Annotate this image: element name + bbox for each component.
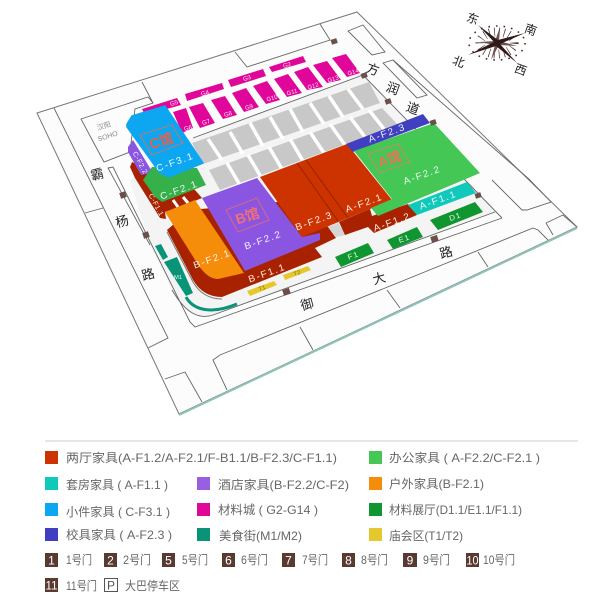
G unit labels: G2: [283, 62, 293, 70]
legend: living and dining furniture: 两厅家具(A-F1.2/A-F2.1/F-B1.1/B-F2.3/C-F1.1): [66, 450, 337, 465]
legend: school furniture: 校具家具 ( A-F2.3 ): [66, 527, 172, 542]
legend: materials city: 材料城 ( G2-G14 ): [218, 503, 318, 517]
G unit labels: G12: [307, 82, 320, 92]
hall A-F1.1 teal: [408, 182, 476, 215]
gate 5: [162, 552, 208, 568]
hall A-F2.2 green: A馆: [375, 148, 403, 170]
label C-F1.1: C-F1.1: [147, 193, 164, 218]
material hall D1: [430, 202, 483, 230]
neighbouring building label: SOHO: [97, 130, 119, 143]
gate 9: [403, 552, 450, 568]
gate 10: [466, 552, 515, 568]
temple fair T2: T2: [293, 270, 302, 278]
hall C-F1.1 dark red: [130, 162, 202, 219]
road name: fangrun road: 道: [404, 99, 422, 118]
G row materials city top strips: [142, 56, 306, 115]
G unit labels: [170, 62, 360, 133]
gate 11: 11号门: [66, 578, 97, 593]
G unit labels: G8: [224, 111, 234, 119]
gate 10: 10号门: [483, 552, 515, 567]
gate 2: 2号门: [123, 552, 151, 567]
building B-F1.1 dark base: [167, 200, 336, 299]
road name: fangrun road: [364, 60, 422, 118]
legend: materials showroom: 材料展厅(D1.1/E1.1/F1.1): [389, 503, 522, 517]
hall A-F2.2 green: A-F2.2: [402, 164, 442, 187]
gate 9: 9: [407, 554, 414, 568]
legend: food street: 美食街(M1/M2): [219, 528, 302, 543]
G unit labels: G7: [202, 119, 212, 127]
gate 6: [222, 552, 268, 568]
gate 1: 1: [48, 554, 55, 568]
legend: small furniture: 小件家具 ( C-F3.1 ): [66, 504, 170, 519]
G unit labels: G13: [327, 75, 340, 85]
bus parking: [104, 578, 180, 593]
temple fair T1: [247, 281, 277, 296]
road name: yuda road: 御: [299, 296, 315, 313]
compass labels: 西: [513, 61, 529, 79]
legend: suite furniture: 套房家具 ( A-F1.1 ): [66, 477, 168, 492]
gate 1: [45, 552, 92, 568]
compass rose: [451, 10, 539, 79]
hall B-F2.2 purple: B馆: [233, 205, 261, 227]
gate 11: [45, 578, 97, 593]
road name: yuda road: 大: [371, 270, 387, 287]
hall A-F2.2 green: [354, 123, 480, 216]
gate 6: 6: [225, 554, 232, 568]
G unit labels: G6: [184, 125, 194, 133]
base sheet: [37, 12, 577, 415]
road name: yuda road: 路: [438, 244, 454, 261]
hall C-F3.1 blue: [127, 106, 203, 177]
compass labels: 南: [523, 20, 539, 39]
G unit labels: G5: [170, 100, 180, 108]
hall B-F2.2 purple: [202, 178, 320, 271]
road name: bayang road: 杨: [114, 213, 130, 230]
legend divider: [45, 440, 578, 442]
compass labels: [451, 10, 539, 79]
gate 5: 5号门: [182, 552, 208, 567]
temple fair T1: T1: [258, 285, 267, 293]
neighbouring building label: [96, 119, 119, 143]
gate 7: [282, 552, 328, 568]
hall A-F1.2 dark red: [328, 204, 417, 237]
material hall E1: [387, 227, 423, 249]
G unit labels: G11: [286, 88, 299, 97]
hall A-F1.2 dark red: A-F1.2: [372, 211, 412, 234]
temple fair T2: [283, 266, 311, 280]
G unit labels: G9: [245, 104, 255, 112]
hall C-F2.1 green: C-F2.1: [159, 179, 200, 202]
road name: bayang road: 路: [140, 266, 156, 283]
gate 7: 7: [285, 554, 292, 568]
halls A-F2.1 and B-F2.3 red: [260, 144, 392, 237]
food street M1: [155, 244, 193, 296]
road name: fangrun road: 方: [364, 60, 382, 79]
hall C-F3.1 blue: C馆: [147, 130, 175, 152]
hall A-F2.3 indigo: [346, 114, 430, 152]
gate 9: 9号门: [423, 552, 450, 567]
hall C-F3.1 blue: C-F3.1: [155, 151, 196, 174]
hall C-F2.2 purple: C-F2.2: [131, 151, 148, 176]
gray vacant units: [192, 82, 398, 190]
G unit labels: G14: [347, 68, 360, 78]
gate 8: [342, 552, 388, 568]
gate 6: 6号门: [241, 552, 268, 567]
road name: fangrun road: 润: [384, 79, 402, 98]
hall B-F2.1 orange: [165, 200, 244, 279]
material hall E1: E1: [397, 233, 411, 245]
legend: temple fair area: 庙会区(T1/T2): [389, 529, 463, 543]
neighbouring building label: 汉阳: [96, 119, 112, 132]
road name: yuda road: [299, 244, 454, 313]
legend: outdoor furniture: 户外家具(B-F2.1): [389, 476, 484, 491]
compass labels: 东: [465, 10, 481, 28]
gate 8: 8: [345, 554, 352, 568]
food street M2: [186, 297, 237, 310]
gate 2: 2: [107, 554, 114, 568]
G row materials city blocks: [173, 54, 360, 133]
hall C-F2.2 purple: [128, 140, 153, 176]
gate 10: 10: [466, 554, 479, 568]
bus parking: P: [107, 578, 115, 592]
hall A-F2.3 indigo: A-F2.3: [367, 122, 407, 145]
G unit labels: G10: [266, 94, 279, 104]
halls A-F2.1 and B-F2.3 red: B-F2.3: [294, 210, 334, 233]
compass labels: 北: [451, 53, 467, 71]
hall B-F2.1 orange: B-F2.1: [192, 248, 232, 271]
legend: [45, 450, 540, 593]
label B-F1.1: B-F1.1: [247, 262, 287, 285]
hall C-F2.1 green: [143, 167, 206, 202]
road name: bayang road: [89, 166, 156, 283]
hall B-F2.2 purple: B-F2.2: [243, 229, 283, 252]
gates on map: [119, 38, 482, 296]
gate 11: 11: [46, 578, 58, 592]
material hall D1: D1: [448, 210, 462, 223]
legend: hotel furniture: 酒店家具(B-F2.2/C-F2): [218, 477, 349, 492]
hall A-F1.1 teal: A-F1.1: [418, 189, 458, 212]
road name: bayang road: 霸: [89, 166, 105, 183]
gate 1: 1号门: [66, 552, 92, 567]
surrounding roads and blocks: [54, 24, 577, 402]
gate 8: 8号门: [361, 552, 388, 567]
G unit labels: G3: [243, 75, 253, 83]
gate 2: [104, 552, 151, 568]
material hall F1: [335, 243, 374, 267]
site map: [37, 12, 577, 415]
material hall F1: F1: [347, 250, 360, 262]
G unit labels: G4: [201, 90, 211, 98]
halls A-F2.1 and B-F2.3 red: A-F2.1: [344, 192, 384, 215]
gate 5: 5: [165, 554, 172, 568]
legend: office furniture: 办公家具 ( A-F2.2/C-F2.1 ): [389, 450, 540, 465]
gate 7: 7号门: [302, 552, 328, 567]
food street M1: M1: [174, 275, 183, 281]
bus parking: 大巴停车区: [125, 578, 180, 593]
